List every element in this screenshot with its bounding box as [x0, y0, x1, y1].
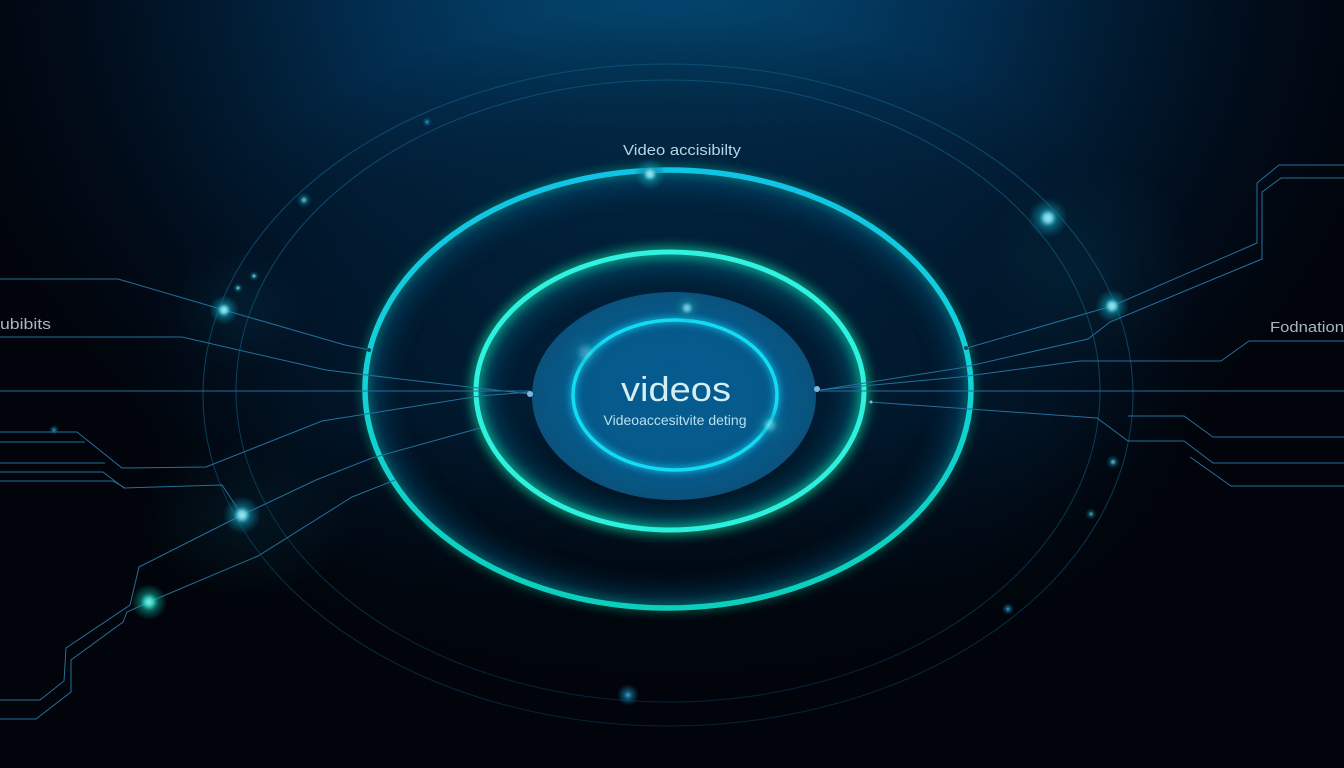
label: top: Video accisibilty: [623, 142, 742, 159]
connector junction dots: [367, 346, 968, 404]
center disc: [532, 292, 816, 500]
outer orbit rings: [203, 64, 1133, 726]
center title: videos: [621, 371, 731, 409]
connector lines: left: [0, 279, 530, 719]
center subtitle: Videoaccesitvite deting: [604, 412, 746, 428]
connector lines: right: [820, 165, 1344, 486]
label: right: Fodnation: [1270, 319, 1344, 336]
glowing nodes: [49, 117, 1129, 706]
ring: inner cyan: [573, 320, 777, 470]
ring: middle green: [476, 252, 864, 530]
label: left: ubibits: [0, 316, 51, 333]
ring: outer teal: [365, 170, 971, 608]
